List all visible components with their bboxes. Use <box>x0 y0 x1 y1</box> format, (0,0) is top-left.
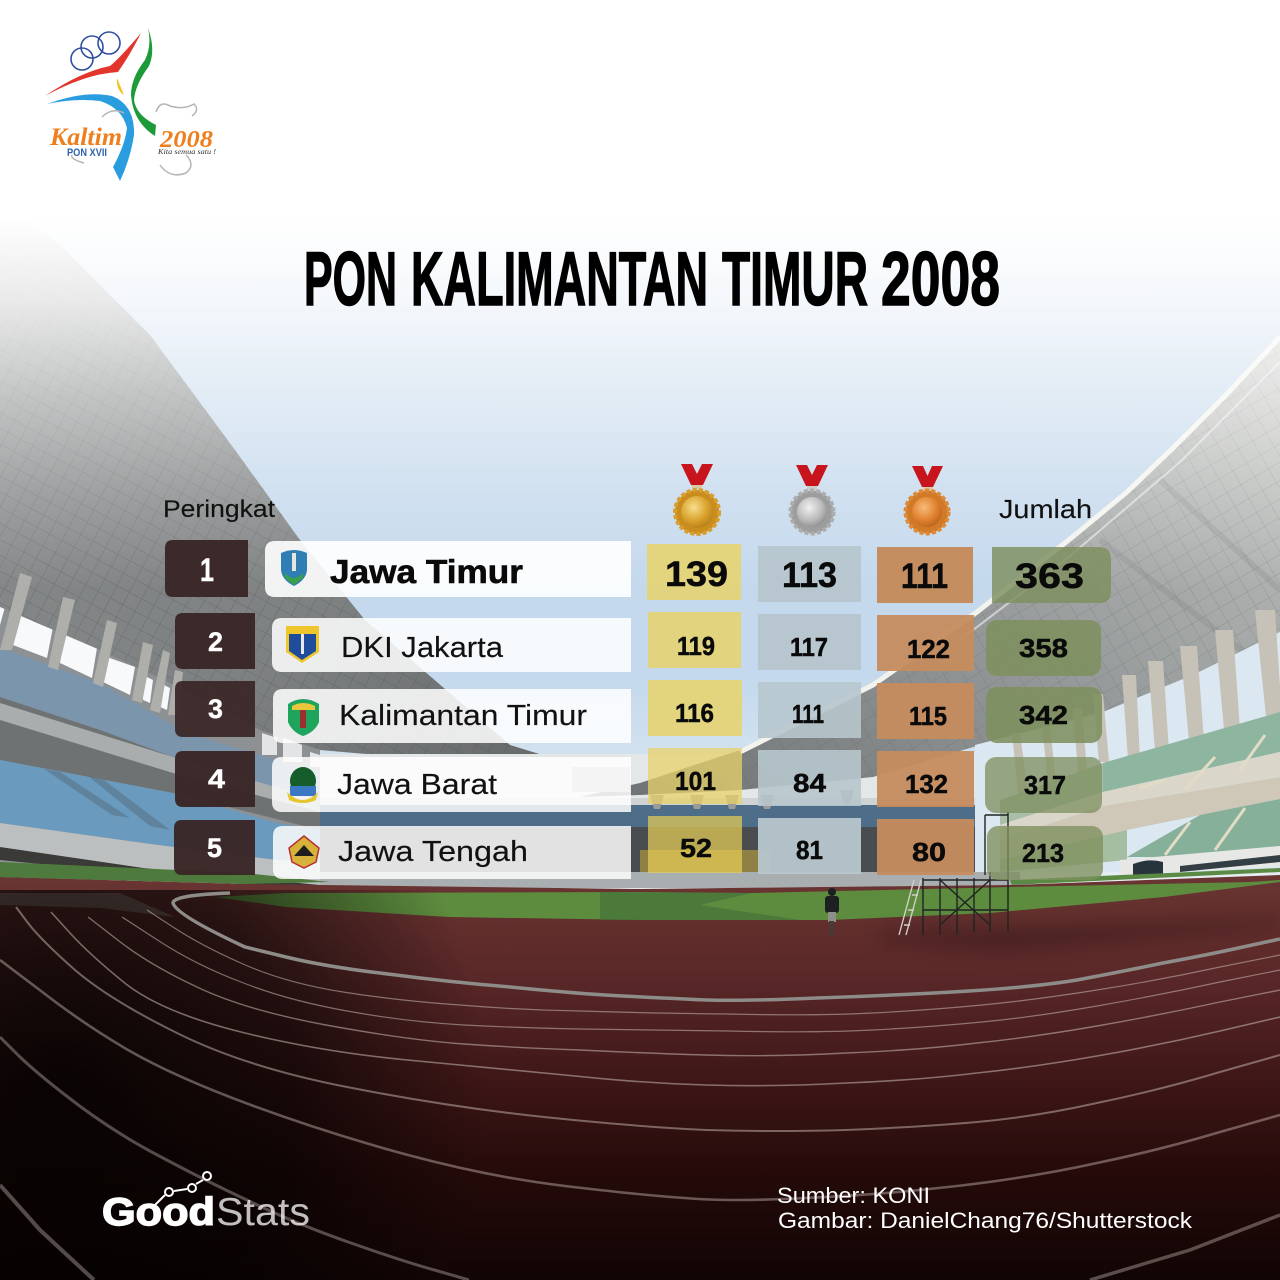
panel: gold medal counts <box>647 544 742 873</box>
rank 2: 2 <box>208 627 223 657</box>
right grass strip <box>1010 868 1280 885</box>
chart line icon <box>155 1172 211 1205</box>
gold row 1 <box>647 544 741 600</box>
rank 1: 1 <box>200 552 214 588</box>
icon: bronze medal <box>906 466 948 534</box>
total row 1: 363 <box>1015 557 1084 596</box>
Kaltim wordmark: Kaltim <box>49 124 122 151</box>
dark shadow on track <box>0 890 500 1280</box>
emblem: Jawa Barat <box>287 767 318 803</box>
scaffolding <box>899 812 1008 935</box>
three rings <box>71 32 120 70</box>
left stand windows <box>0 605 320 767</box>
left roof of stadium <box>0 195 640 795</box>
left haze patch <box>0 893 175 917</box>
source credit: Sumber: KONI <box>777 1183 930 1208</box>
team dugout <box>1133 860 1163 876</box>
row: DKI Jakarta: DKI Jakarta <box>341 632 504 664</box>
gold row 2: 119 <box>677 631 715 661</box>
silver row 3 <box>758 682 861 738</box>
tagline: Kita semua satu ! <box>157 148 217 156</box>
yellow swoosh <box>117 78 124 95</box>
rank 1 <box>165 540 248 597</box>
bronze row 2 <box>877 615 974 671</box>
gold row 3 <box>648 680 742 736</box>
gold row 4: 101 <box>675 766 716 796</box>
athlete silhouette <box>825 888 839 935</box>
rank 5 <box>174 820 255 875</box>
rank 2 <box>175 613 255 669</box>
left stand seats and tiers <box>0 648 320 892</box>
track surface <box>0 875 1280 1280</box>
icon: gold medal <box>675 464 719 534</box>
bronze row 5: 80 <box>912 837 946 867</box>
gold row 1: 139 <box>665 555 728 594</box>
bronze row 5 <box>877 819 974 875</box>
silver row 4 <box>758 750 861 806</box>
row: DKI Jakarta <box>272 618 631 672</box>
gold row 5 <box>648 816 742 873</box>
silver row 2: 117 <box>790 632 828 662</box>
grey swirls <box>72 104 197 175</box>
panel: total counts <box>985 547 1111 880</box>
bronze row 3 <box>877 683 974 739</box>
rank 4 <box>175 751 255 807</box>
total row 3: 342 <box>1019 700 1068 730</box>
bronze row 1 <box>877 547 973 603</box>
title: TIMUR <box>722 237 868 322</box>
rank 5: 5 <box>207 833 222 863</box>
silver row 5: 81 <box>796 835 823 865</box>
row: Jawa Tengah <box>273 826 631 879</box>
total row 2: 358 <box>1019 633 1068 663</box>
bronze row 3: 115 <box>909 701 947 731</box>
title: PON <box>304 237 397 322</box>
row: Kalimantan Timur <box>273 689 631 743</box>
row: Jawa Barat: Jawa Barat <box>337 769 497 801</box>
gold row 3: 116 <box>675 698 714 728</box>
logo: PON XVII Kaltim 2008 <box>45 28 217 181</box>
logo: GoodStats <box>102 1172 310 1234</box>
column heading: Peringkat: Peringkat <box>163 496 275 523</box>
panel: silver medal counts <box>758 546 861 874</box>
panel: rank badges <box>165 540 255 875</box>
emblem: Kalimantan Timur <box>288 699 319 736</box>
gold row 4 <box>648 748 742 804</box>
left stand backing wall <box>0 590 320 880</box>
source credit: Gambar: DanielChang76/Shutterstock <box>778 1208 1193 1233</box>
green swoosh <box>131 28 156 136</box>
silver row 4: 84 <box>793 768 827 798</box>
2008: 2008 <box>159 127 213 153</box>
emblem: Jawa Timur <box>281 550 307 586</box>
icon: silver medal <box>790 465 834 534</box>
scoreboard <box>572 767 630 792</box>
panel: province names <box>265 541 631 879</box>
inner kerb <box>173 893 1280 1000</box>
gold row 5: 52 <box>680 833 712 863</box>
bronze row 4: 132 <box>905 769 948 799</box>
blue swoosh <box>47 94 134 181</box>
emblem: Jawa Tengah <box>289 836 319 868</box>
total row 5: 213 <box>1022 838 1064 868</box>
left grass strip <box>0 862 330 884</box>
right roof of stadium <box>580 334 1280 797</box>
shadowed grass <box>600 892 800 920</box>
silver row 1 <box>758 546 861 602</box>
total row 1 <box>992 547 1111 603</box>
gold row 2 <box>648 612 741 668</box>
total row 4: 317 <box>1024 770 1066 800</box>
title: KALIMANTAN <box>411 237 708 322</box>
row: Jawa Timur <box>265 541 631 597</box>
total row 4 <box>985 757 1102 813</box>
silver row 3: 111 <box>792 699 824 729</box>
emblem: DKI Jakarta <box>286 626 319 663</box>
red swoosh <box>45 33 141 96</box>
track lane lines <box>0 907 1280 1280</box>
bronze row 2: 122 <box>907 634 950 664</box>
left stand pillars <box>0 573 183 715</box>
source credit <box>777 1183 1193 1233</box>
rank 4: 4 <box>208 764 225 794</box>
silver row 2 <box>758 614 861 670</box>
total row 3 <box>986 687 1102 743</box>
rank 3 <box>175 681 255 737</box>
total row 2 <box>986 620 1101 676</box>
column heading: Jumlah: Jumlah <box>999 494 1092 524</box>
shadow band on right of track <box>880 918 1280 952</box>
infield grass <box>216 880 1280 920</box>
haze under far roof <box>320 754 1020 804</box>
bronze row 4 <box>877 751 974 807</box>
PON XVII: PON XVII <box>67 147 107 159</box>
panel: bronze medal counts <box>877 547 974 875</box>
total row 5 <box>987 826 1103 880</box>
far stand <box>320 790 1020 888</box>
silver row 1: 113 <box>782 556 837 595</box>
row: Jawa Tengah: Jawa Tengah <box>338 836 528 868</box>
row: Kalimantan Timur: Kalimantan Timur <box>339 700 587 732</box>
row: Jawa Barat <box>272 757 631 812</box>
logo: GoodStats: Stats <box>216 1191 310 1234</box>
row: Jawa Timur: Jawa Timur <box>330 553 523 590</box>
rank 3: 3 <box>208 694 223 724</box>
silver row 5 <box>758 818 861 874</box>
title: 2008 <box>881 237 1000 322</box>
logo: GoodStats: Good <box>102 1191 215 1234</box>
bronze row 1: 111 <box>901 557 948 596</box>
right stand and columns <box>975 610 1280 876</box>
